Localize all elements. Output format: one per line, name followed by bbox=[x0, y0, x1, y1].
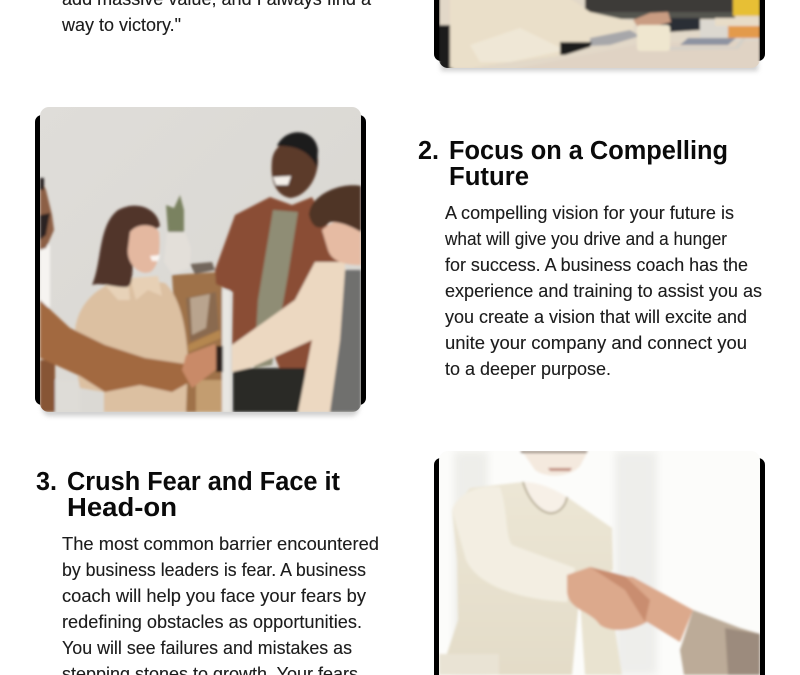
heading: section 2: 2. bbox=[418, 137, 439, 165]
text block: section 2 body: to a deeper purpose. bbox=[445, 359, 611, 379]
text block: section 3 body: by business leaders is fear. A business bbox=[62, 560, 366, 580]
left person background bbox=[40, 245, 50, 307]
woman face bbox=[128, 225, 160, 273]
vase and plant bbox=[164, 232, 191, 274]
text block: section 3 body: coach will help you face your fears by bbox=[62, 586, 366, 606]
photo: two people shaking hands bbox=[434, 451, 765, 675]
text block: section 2 body: experience and training to assist you as bbox=[445, 281, 762, 301]
text block: section 2 body: A compelling vision for your future is bbox=[445, 203, 734, 223]
text block: section 3 body: The most common barrier encountered bbox=[62, 534, 379, 554]
woman hair bbox=[92, 206, 160, 287]
right person face and hair bbox=[322, 220, 361, 265]
heading: section 3: 3. bbox=[36, 468, 57, 496]
heading: section 3 bbox=[36, 468, 340, 522]
text block: closing quote of section 1 bbox=[61, 0, 372, 35]
text block: section 3 body: redefining obstacles as opportunities. bbox=[62, 612, 362, 632]
heading: section 2 bbox=[418, 137, 728, 191]
text block: section 3 body bbox=[62, 534, 379, 675]
photo: office desk with coffee cup and laptop bbox=[434, 0, 765, 71]
standing man head bbox=[272, 139, 318, 198]
forearm bbox=[40, 300, 197, 392]
standing man shirt bbox=[215, 197, 340, 382]
heading: section 2: Focus on a Compelling bbox=[449, 137, 728, 165]
text block: section 2 body: unite your company and connect you bbox=[445, 333, 747, 353]
text block: section 2 body bbox=[444, 203, 762, 379]
text block: section 2 body: what will give you drive and a hunger bbox=[444, 229, 727, 249]
text block: closing quote of section 1: way to victory." bbox=[61, 15, 181, 35]
photo: team handshake in office bbox=[35, 107, 366, 416]
heading: section 3: Head-on bbox=[67, 494, 177, 522]
standing man tee bbox=[254, 210, 298, 368]
text block: section 2 body: you create a vision that will excite and bbox=[445, 307, 747, 327]
text block: section 3 body: You will see failures and mistakes as bbox=[62, 638, 352, 658]
heading: section 2: Future bbox=[449, 163, 529, 191]
woman blouse bbox=[75, 278, 188, 412]
right person blazer bbox=[232, 262, 345, 412]
hands bbox=[182, 344, 222, 388]
heading: section 3: Crush Fear and Face it bbox=[67, 468, 340, 496]
shelf bbox=[172, 272, 222, 412]
text block: section 2 body: for success. A business coach has the bbox=[445, 255, 748, 275]
